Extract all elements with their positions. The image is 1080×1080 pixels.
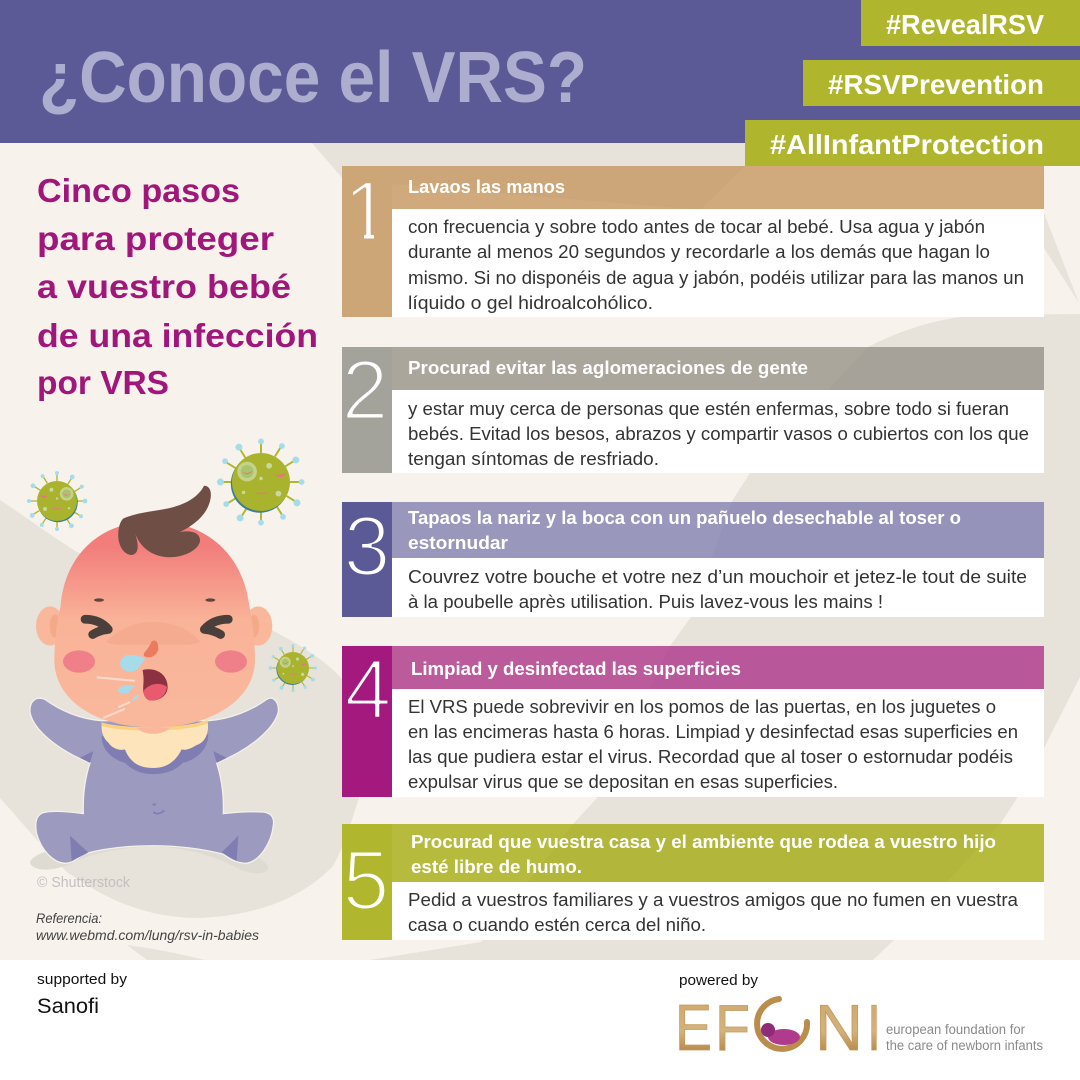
subtitle heading: Cinco pasos (37, 173, 240, 210)
reference (36, 910, 259, 943)
title: ¿Conoce el VRS? (39, 38, 587, 118)
panel: step 1: durante al menos 20 segundos y recordarle a los demás que hagan lo (408, 241, 990, 262)
hashtag tags: #RSVPrevention (828, 69, 1044, 100)
panel: step 4: las que pudiera estar el virus. Recordad que al toser o estornudar podéis (408, 746, 1013, 767)
supported by (37, 971, 128, 1018)
subtitle heading: de una infección (37, 318, 318, 355)
panel: step 2 (342, 343, 1044, 473)
panel: step 5: casa o cuando estén cerca del niño. (408, 914, 706, 935)
panel: step 5: Pedid a vuestros familiares y a vuestros amigos que no fumen en vuestra (408, 889, 1019, 910)
panel: step 2: y estar muy cerca de personas que estén enfermas, sobre todo si fueran (408, 398, 1009, 419)
panel: step 5: esté libre de humo. (411, 856, 582, 877)
logo: EFCNI: E (675, 991, 712, 1064)
reference: www.webmd.com/lung/rsv-in-babies (36, 927, 259, 943)
icon: small virus left (27, 471, 87, 531)
panel: step 2: tengan síntomas de resfriado. (408, 448, 659, 469)
panel: step 2: Procurad evitar las aglomeraciones de gente (408, 357, 808, 378)
panel: step 4 (342, 642, 1044, 797)
logo: EFCNI: european foundation for (886, 1022, 1025, 1037)
logo: EFCNI: the care of newborn infants (886, 1038, 1043, 1053)
panel: step 2: 2 (342, 343, 388, 437)
panel: step 2: bebés. Evitad los besos, abrazos y compartir vasos o cubiertos con los que (408, 423, 1029, 444)
panel: step 1 (342, 164, 1044, 317)
panel: step 3: estornudar (408, 532, 508, 553)
panel: step 4: El VRS puede sobrevivir en los pomos de las puertas, en los juguetes o (408, 696, 996, 717)
panel: step 4: 4 (345, 642, 391, 736)
panel: step 1: 1 (344, 164, 390, 258)
panel: step 5: 5 (343, 833, 389, 927)
logo: EFCNI: I (867, 991, 881, 1064)
icon: virus right (269, 644, 317, 692)
panel: step 4: Limpiad y desinfectad las superficies (411, 658, 741, 679)
panel: step 4: en las encimeras hasta 6 horas. Limpiad y desinfectad esas superficies en (408, 721, 1018, 742)
subtitle heading (37, 173, 318, 402)
panel: step 3: à la poubelle après utilisation. Puis lavez-vous les mains ! (408, 591, 883, 612)
hashtag tags (745, 0, 1080, 166)
logo: EFCNI (675, 991, 1043, 1064)
panel: step 5 (342, 824, 1044, 940)
logo: EFCNI: N (815, 991, 863, 1064)
subtitle heading: por VRS (37, 365, 169, 402)
panel: step 3: Tapaos la nariz y la boca con un pañuelo desechable al toser o (408, 507, 961, 528)
subtitle heading: para proteger (37, 221, 274, 258)
baby (30, 486, 278, 873)
subtitle heading: a vuestro bebé (37, 269, 291, 306)
hashtag tags: #RevealRSV (886, 9, 1045, 40)
powered by: powered by (679, 972, 758, 989)
icon: large virus (217, 438, 304, 526)
panel: step 1: con frecuencia y sobre todo antes de tocar al bebé. Usa agua y jabón (408, 216, 985, 237)
supported by: supported by (37, 971, 128, 988)
panel: step 3: 3 (344, 499, 390, 593)
panel: step 1: Lavaos las manos (408, 176, 565, 197)
footer band (0, 960, 1080, 1080)
reference: Referencia: (36, 910, 102, 926)
copyright note: © Shutterstock (37, 875, 131, 891)
logo: EFCNI: F (715, 991, 750, 1064)
panel: step 4: expulsar virus que se depositan en esas superficies. (408, 771, 838, 792)
panel: step 5: Procurad que vuestra casa y el ambiente que rodea a vuestro hijo (411, 831, 996, 852)
header banner (0, 0, 1080, 143)
panel: step 1: líquido o gel hidroalcohólico. (408, 292, 653, 313)
panel: step 3 (342, 499, 1044, 617)
illustration: sneezing baby with viruses (27, 438, 317, 873)
supported by: Sanofi (37, 995, 99, 1018)
panel: step 1: mismo. Si no disponéis de agua y jabón, podéis utilizar para las manos un (408, 267, 1024, 288)
hashtag tags: #AllInfantProtection (770, 129, 1044, 160)
panel: step 3: Couvrez votre bouche et votre nez d’un mouchoir et jetez-le tout de suite (408, 566, 1027, 587)
